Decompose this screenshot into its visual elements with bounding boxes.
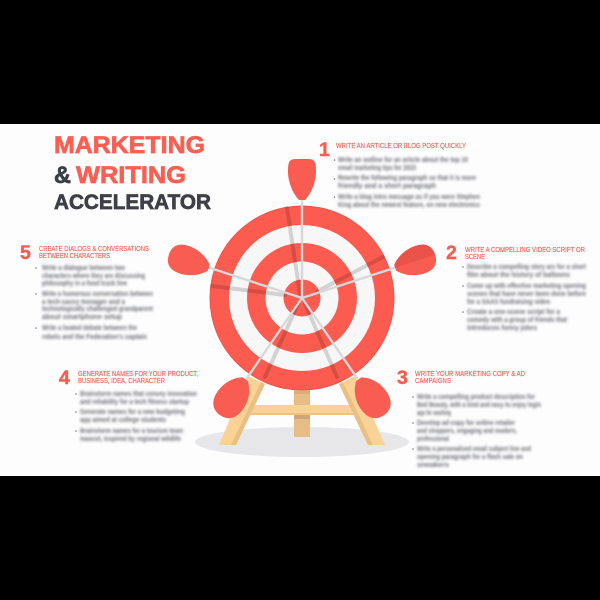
bullets 2	[462, 264, 587, 332]
heading 4: BUSINESS, IDEA, CHARACTER	[78, 378, 165, 385]
dart 1 fletching top	[288, 159, 316, 200]
number 1: 1	[319, 139, 330, 161]
title: ACCELERATOR	[54, 190, 211, 214]
bullets 2: Create a one-scene script for a	[467, 309, 560, 316]
bullets 3: app for washing	[417, 410, 451, 417]
heading 5	[39, 246, 149, 260]
bullets 3: Write a personalized email subject line and	[417, 446, 531, 453]
bullets 5: Write a dialogue between two	[42, 265, 125, 272]
panel: white infographic background	[0, 124, 600, 476]
bullets 1: Write a blog intro message as if you were Stephen	[338, 194, 480, 201]
bullets 5	[35, 265, 154, 341]
illustration: target with darts on stand	[164, 159, 440, 457]
heading 2	[465, 247, 585, 261]
stand	[219, 376, 385, 445]
bullets 5: philosophy in a food truck line	[42, 280, 127, 288]
bullets 3: sneakers	[417, 462, 449, 469]
bullets 2: comedy with a group of friends that	[467, 317, 568, 324]
dart 2 fletching right	[391, 241, 440, 282]
bullets 5: technologically challenged grandparent	[42, 306, 154, 313]
dart shadows on board	[212, 208, 383, 377]
section 1: article or blog post	[319, 139, 480, 209]
bullets 3: Write a compelling product description for	[417, 394, 535, 401]
title	[54, 132, 211, 214]
bullets 5: Write a humorous conversation between	[42, 291, 153, 298]
bullets 4: Brainstorm names for a tourism town	[80, 428, 183, 435]
dart 5 fletching left	[164, 241, 213, 282]
dart 4 fletching lower left	[207, 370, 258, 424]
bullets 4: mascot, inspired by regional wildlife	[80, 436, 181, 443]
bullets 3: Bed Beauty, with a kind and easy to enjoy login	[417, 402, 541, 409]
title: WRITING	[76, 162, 186, 189]
bullets 5: about smartphone setup	[42, 314, 122, 321]
dart shafts	[207, 198, 397, 378]
heading 5: BETWEEN CHARACTERS	[39, 253, 110, 260]
heading 1: WRITE AN ARTICLE OR BLOG POST QUICKLY	[336, 143, 466, 150]
number 2: 2	[446, 242, 457, 264]
bullets 4: Generate names for a new budgeting	[80, 409, 185, 416]
bullets 2: film about the history of balloons	[467, 272, 570, 279]
bullets 5: characters where they are discussing	[42, 273, 145, 280]
bullets 1: email marketing tips for 2023	[338, 165, 416, 172]
bullets 1	[334, 157, 480, 209]
bullets 1: Rewrite the following paragraph so that it is more	[338, 175, 476, 182]
bullets 2: for a SAAS fundraising video	[467, 299, 550, 306]
heading 3: CAMPAIGNS	[415, 378, 451, 385]
bullets 4: and reliability for a tech fitness startup	[80, 399, 189, 406]
heading 4: GENERATE NAMES FOR YOUR PRODUCT,	[78, 371, 198, 378]
heading 2: SCENE	[465, 254, 485, 261]
bullets 3: professional	[417, 436, 449, 443]
heading 5: CREATE DIALOGS & CONVERSATIONS	[39, 246, 149, 253]
number 4: 4	[59, 367, 70, 389]
number 3: 3	[397, 367, 408, 389]
bullets 3: and shoppers, engaging and modern,	[417, 428, 517, 435]
section 3: marketing copy	[397, 367, 541, 469]
section 5: dialogs and conversations	[20, 242, 154, 341]
bullets 4	[75, 391, 197, 443]
number 5: 5	[20, 242, 31, 264]
title: &	[54, 162, 71, 189]
heading 3	[415, 371, 525, 385]
bullets 5: Write a heated debate between the	[42, 325, 137, 332]
bullets 2: introduces funny jokes	[467, 325, 537, 332]
target board	[210, 206, 394, 390]
heading 3: WRITE YOUR MARKETING COPY & AD	[415, 371, 525, 378]
heading 4	[78, 371, 198, 385]
bullets 4: app aimed at college students	[80, 417, 166, 424]
bullets 3: opening paragraph for a flash sale on	[417, 454, 523, 461]
bullets 1: friendly and a short paragraph	[338, 183, 436, 190]
bullets 3	[412, 394, 541, 469]
bullets 4: Brainstorm names that convey innovation	[80, 391, 197, 398]
section 2: video script	[446, 242, 587, 332]
section 4: generate names	[59, 367, 198, 443]
bullets 5: rebels and the Federation's captain	[42, 334, 147, 341]
bullets 1: King about the newest feature, on new electronics	[338, 202, 480, 209]
title: MARKETING	[54, 132, 205, 159]
bullets 3: Develop ad copy for online retailer	[417, 420, 515, 427]
bullets 1: Write an outline for an article about the top 10	[338, 157, 468, 164]
dart 3 fletching lower right	[346, 370, 397, 424]
ground shadow	[195, 427, 409, 457]
bullets 5: a tech-savvy teenager and a	[42, 299, 125, 306]
